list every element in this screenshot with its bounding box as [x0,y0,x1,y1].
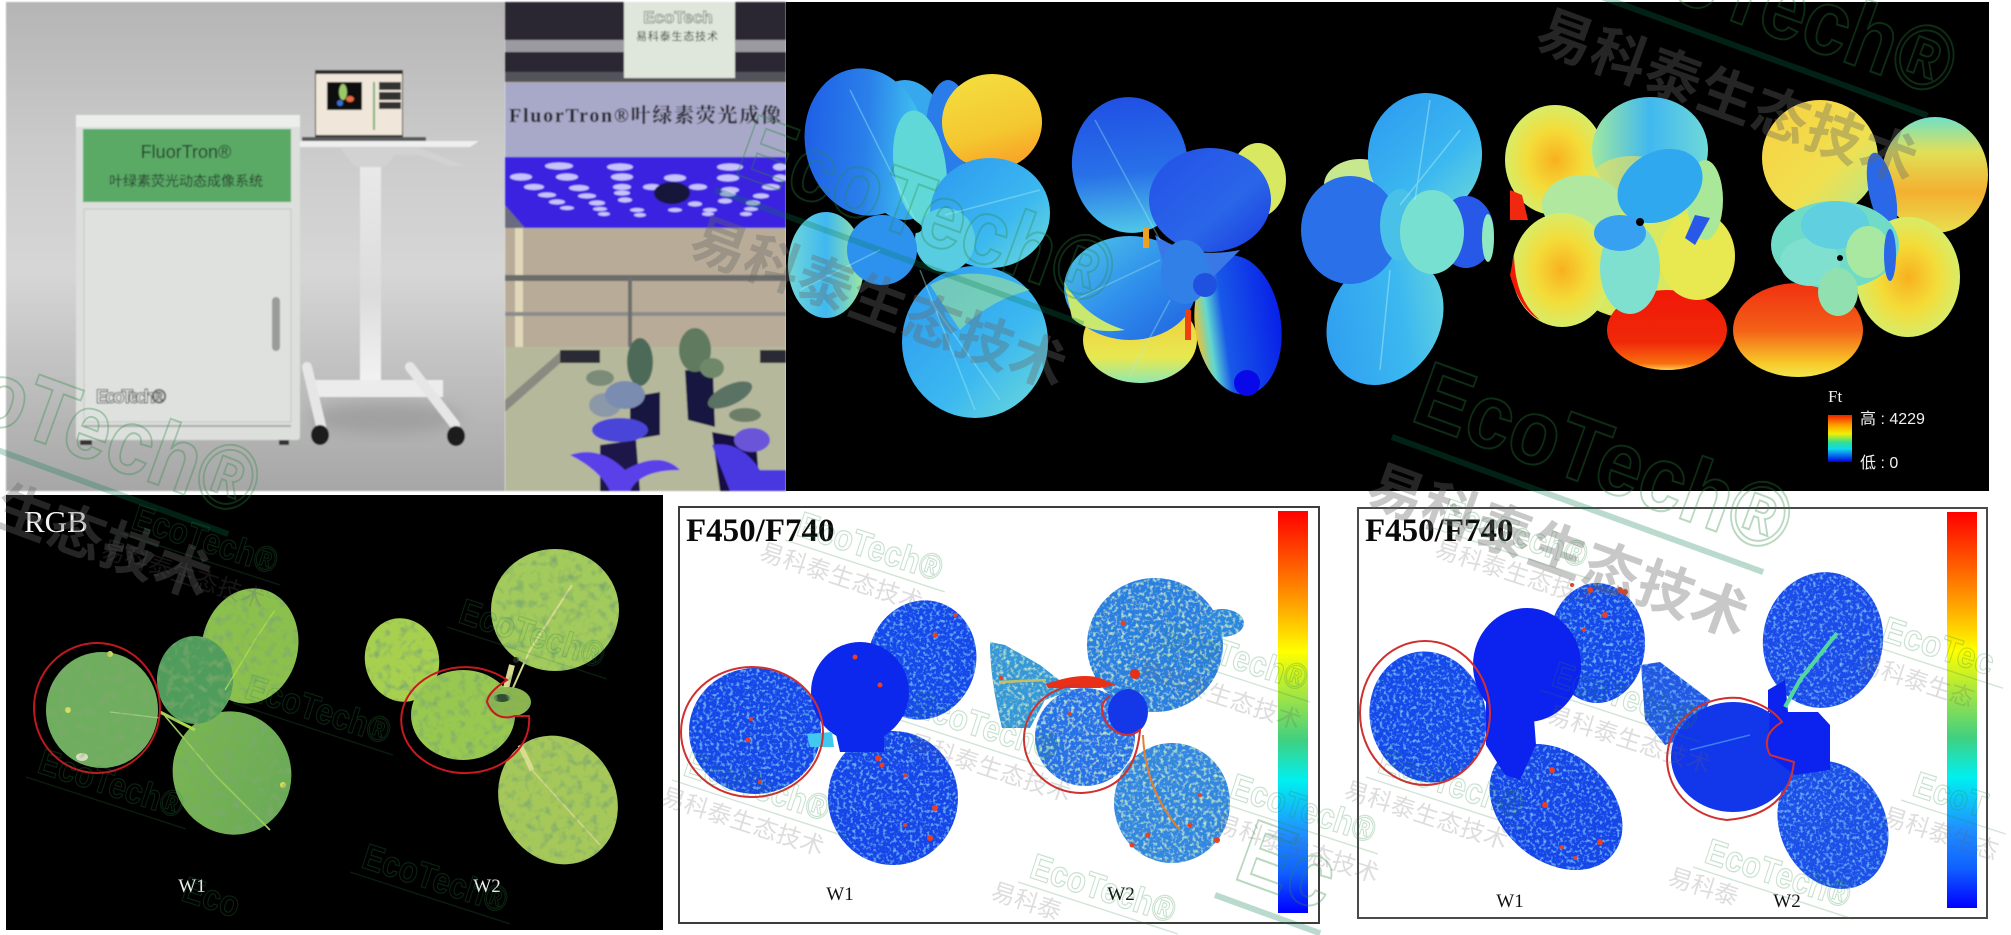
plant image 2 [1064,92,1290,400]
plant image 1 [788,59,1050,418]
plant W2 leaves [357,549,640,886]
legend minimum: 低 : 0 [1860,454,1898,472]
nameplate product name: FluorTron® [141,142,231,162]
plant image 4 [1505,97,1735,370]
watermarks: small EcoTech logos: EcoTech® [1158,613,1313,699]
W1 plant map [1355,583,1647,896]
colour bar [1947,512,1977,908]
blue LED panel [505,157,787,228]
watermarks: small EcoTech logos: EcoTech® [1374,740,1529,826]
watermarks: small EcoTech logos: EcoTech® [1438,490,1593,576]
colour bar [1278,511,1308,913]
watermarks: small EcoTech logos: 易科泰 [1665,864,1742,912]
box brand: EcoTech [643,8,713,27]
watermarks: small EcoTech logos: 易科泰生态 [1879,803,2002,866]
box company name: 易科泰生态技术 [636,29,718,43]
watermarks: small EcoTech logos: EcoTech® [358,835,513,921]
panel: RGB photograph [6,495,663,930]
panel: F450/F740 chart two [1355,508,1987,918]
title: F450/F740 [686,513,834,549]
watermarks: large EcoTech logos: EcoTech® [1402,343,1805,573]
watermarks: large EcoTech logos: EcoTech® [725,96,1128,326]
instrument band [505,83,786,157]
watermarks: small EcoTech logos: EcoTech® [241,666,396,752]
watermarks: small EcoTech logos: EcoTec [1878,608,2000,683]
watermarks: small EcoTech logos [26,488,2011,935]
watermarks: small EcoTech logos: EcoTech® [455,590,610,676]
label W1: W1 [178,876,206,897]
watermarks: small EcoTech logos: 易科泰 [988,878,1065,926]
RGB label: RGB [24,504,88,539]
legend title: Ft [1828,387,1842,406]
green nameplate [83,129,291,202]
W2 marker circle [1667,698,1794,820]
watermarks: large EcoTech logos: Ec [1225,801,1350,929]
label W2: W2 [1773,891,1801,912]
watermarks: small EcoTech logos: 易科泰生态技术 [1212,810,1382,888]
watermarks: small EcoTech logos: EcoTech® [128,496,283,582]
instrument logo box [624,2,735,78]
table shadow [310,402,460,434]
instrument band label: FluorTron®叶绿素荧光成像 [509,103,781,127]
W1 marker circle [1360,641,1490,785]
watermarks: small EcoTech logos: EcoTech® [680,743,835,829]
watermarks: small EcoTech logos: 易科泰生态技术 [756,539,926,617]
chamber rear wall and rails [505,228,786,347]
legend colour bar [1828,415,1852,462]
watermarks: small EcoTech logos: EcoT [1909,763,1993,826]
watermarks: small EcoTech logos: 易科泰生态技术 [1544,701,1714,780]
W2 red vein region [999,680,1046,682]
W2 hot spots [999,620,1220,848]
watermarks: small EcoTech logos: 易科泰生态技术 [904,729,1074,808]
chamber top frame [505,2,786,80]
door handle [272,297,280,351]
cabinet door [84,209,291,422]
watermarks: large EcoTech logos: 易科泰生态技术 [682,206,1075,400]
W1 hot spots [746,613,957,841]
watermarks: small EcoTech logos: EcoTech® [793,503,948,589]
label W2: W2 [1107,884,1135,905]
W1 marker circle [681,667,823,797]
watermarks: small EcoTech logos: EcoTech® [908,683,1063,769]
watermarks: small EcoTech logos: EcoTech® [34,740,189,826]
legend maximum: 高 : 4229 [1860,410,1925,428]
W1 plant map [689,588,990,865]
chamber floor [505,347,786,491]
W1 hot spots [1542,583,1628,860]
lift table [300,141,479,446]
watermarks: small EcoTech logos: 易科泰生态 [1855,650,1977,713]
watermarks: small EcoTech logos: 易科泰生态技术 [1134,657,1304,735]
nameplate system name: 叶绿素荧光动态成像系统 [109,173,263,189]
plant W1 leaves [46,579,309,851]
W2 marker circle [1024,685,1140,793]
title: F450/F740 [1365,513,1513,549]
W2 bright midrib [1785,633,1837,707]
watermarks: small EcoTech logos: EcoTech® [1701,830,1856,916]
legend: Ft colour scale [1828,387,1925,472]
label W1: W1 [826,884,854,905]
panel: Ft chlorophyll fluorescence images [786,2,1989,491]
watermarks: small EcoTech logos: Eco [178,868,245,925]
cabinet logo: EcoTech® [96,387,166,408]
panel: F450/F740 chart one [679,507,1319,923]
plant image 5 [1733,100,1988,377]
label W1: W1 [1496,891,1524,912]
instrument cabinet [76,115,300,445]
W2 plant map [990,578,1244,863]
plant W1 marker circle [34,643,160,773]
watermarks: small EcoTech logos: 易科泰生态技术 [1432,535,1602,614]
watermarks: small EcoTech logos: 易科泰生态技术 [98,536,268,614]
plant W2 marker circle [401,667,529,773]
watermarks: small EcoTech logos: 易科泰生态技术 [657,783,827,861]
panel: FluorTron instrument photo [6,2,505,491]
watermarks: large EcoTech logos: 易科泰生态技术 [1359,453,1757,649]
label W2: W2 [473,876,501,897]
W2 plant map [1641,564,1909,907]
laptop [302,70,426,141]
watermarks: large EcoTech logos: 易科泰生态技术 [1528,0,1926,194]
watermarks: small EcoTech logos: 易科泰生态技术 [1341,777,1511,855]
panel: imaging chamber photo [505,2,787,491]
plants under test [570,328,786,491]
watermarks: small EcoTech logos: EcoTech® [1548,653,1703,739]
plant image 3 [1301,88,1494,406]
watermarks: small EcoTech logos: EcoTech® [1226,765,1381,851]
